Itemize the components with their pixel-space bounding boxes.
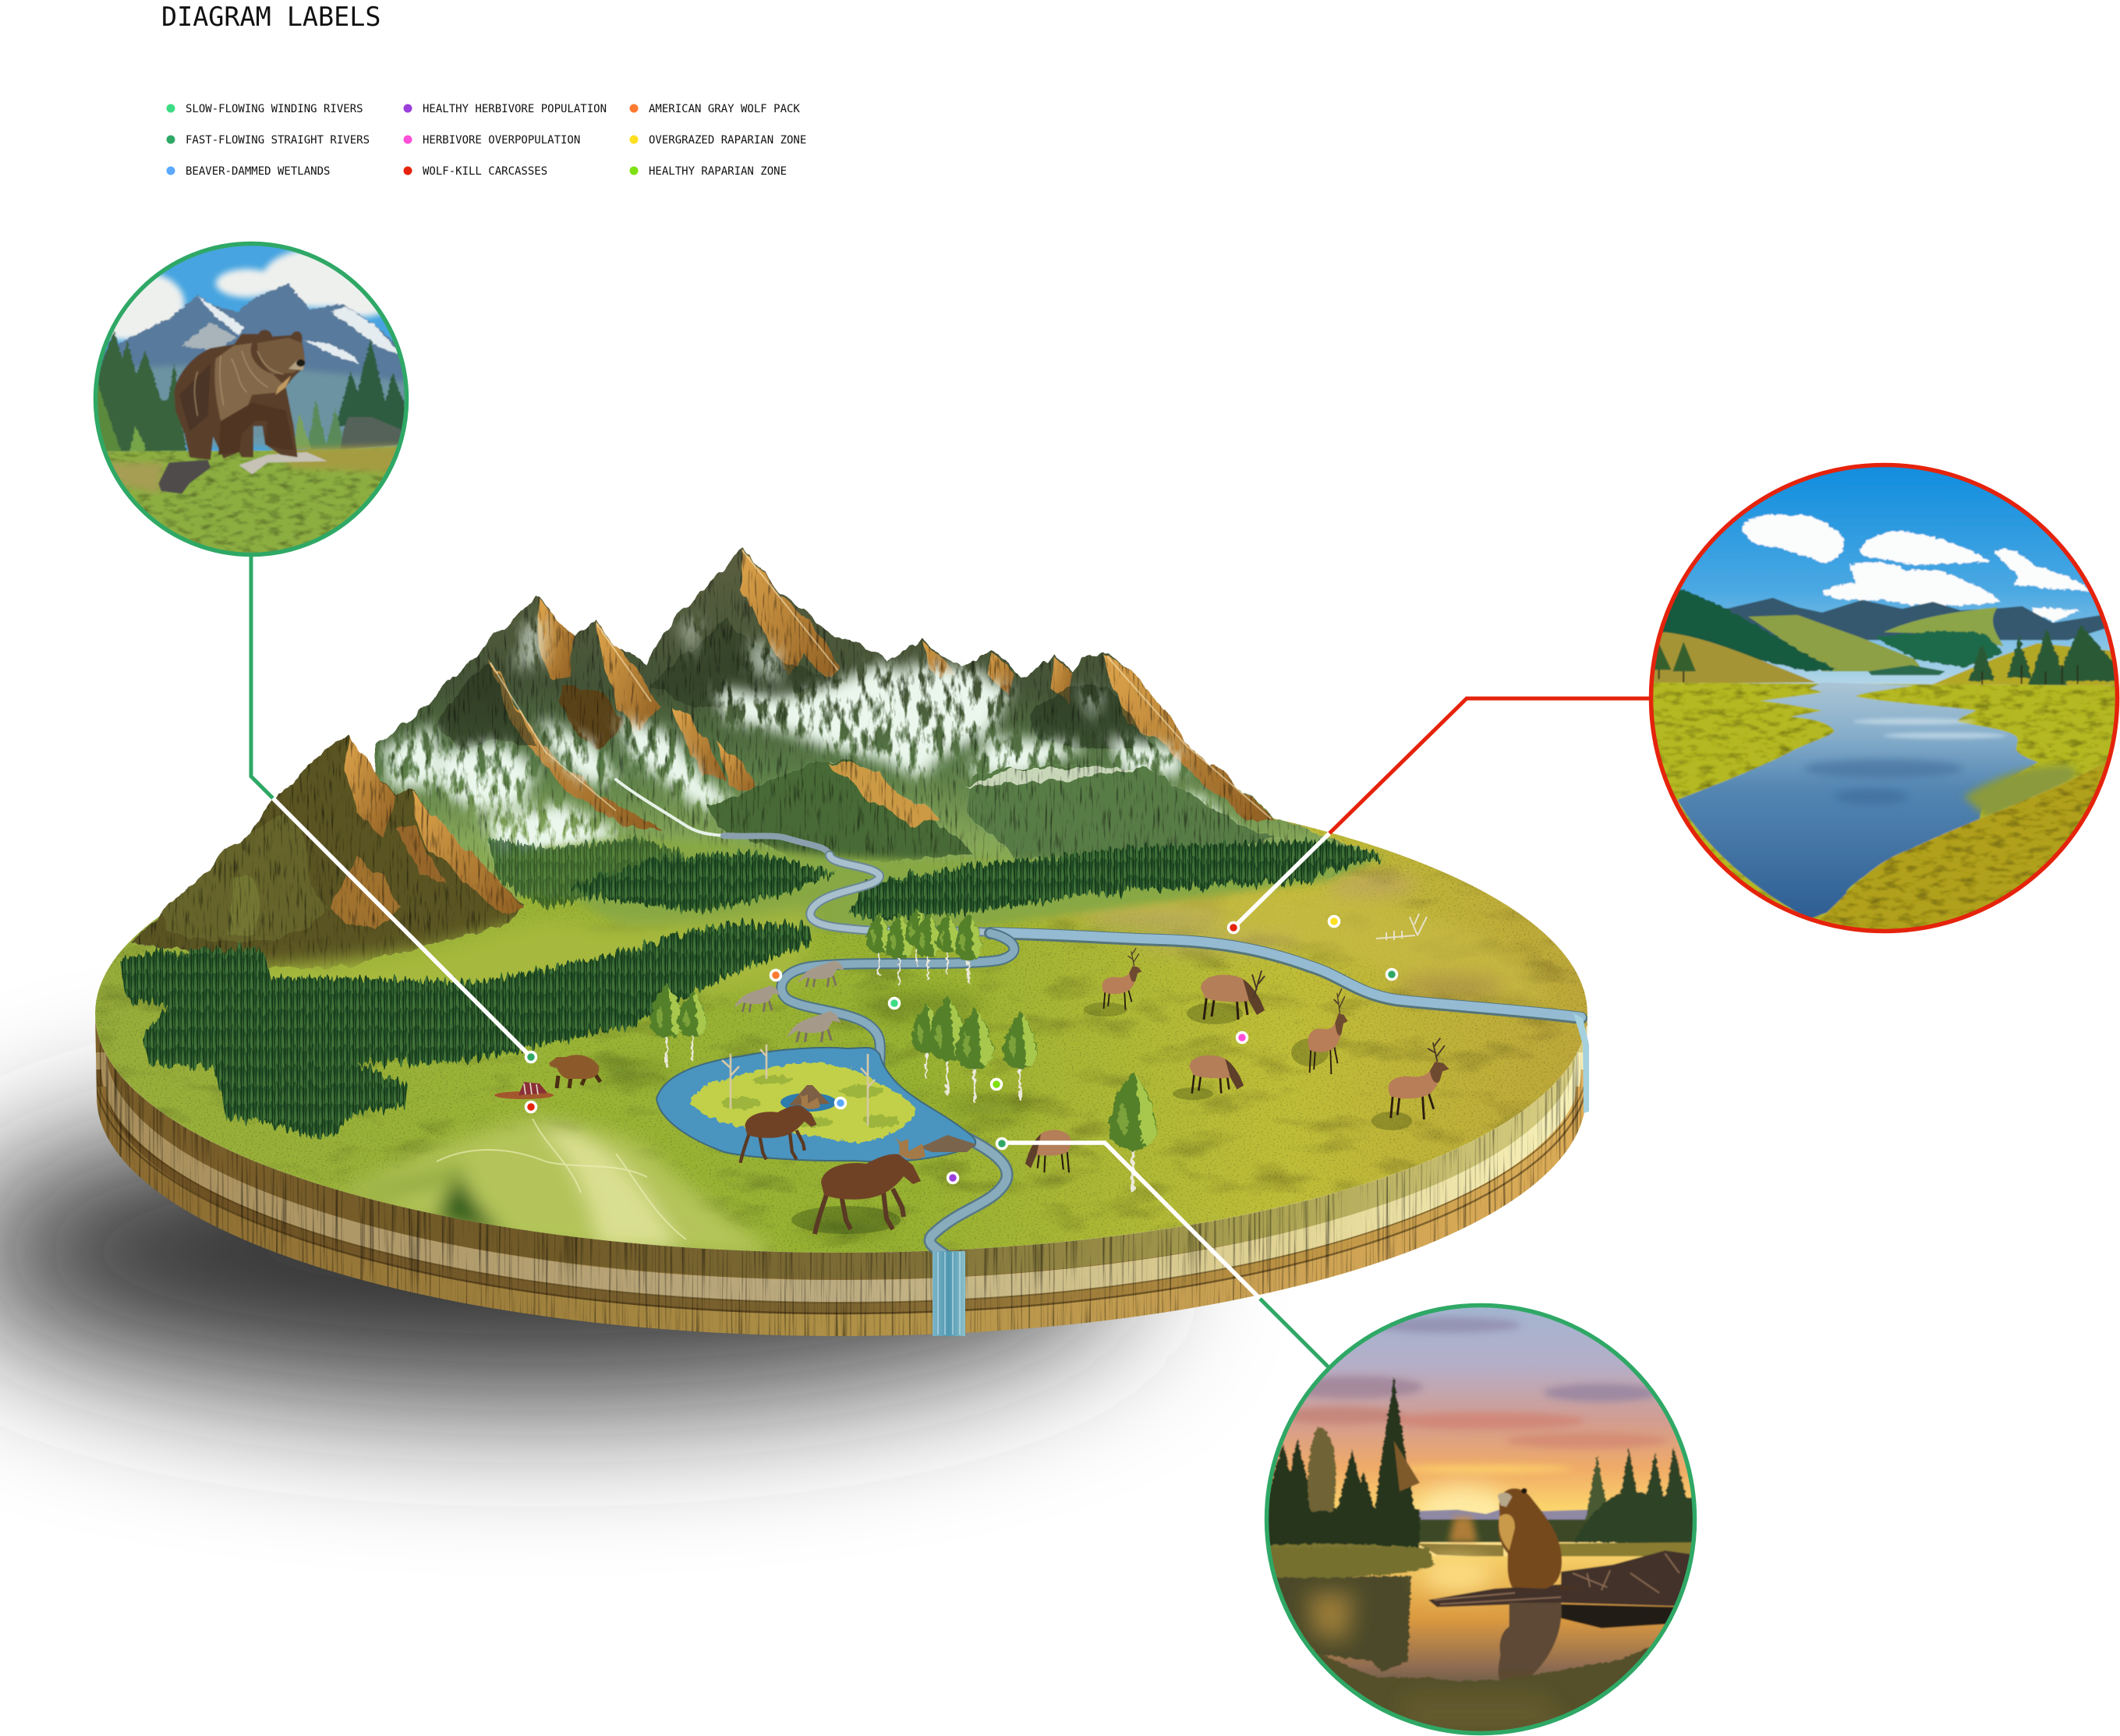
fast straight river [990,932,1581,1018]
forest: large left [120,924,812,1139]
marker: healthy zone [992,1079,1001,1090]
photo circle: meandering river valley [1637,452,2120,953]
sky [1255,1294,1717,1576]
ridge highlights [490,550,1271,819]
legend item: overgrazed zone: OVERGRAZED RAPARIAN ZONE [649,134,806,147]
photo circle: grizzly bear [94,242,409,557]
connector: bear circle [251,552,531,1057]
ground shadow [0,1103,1131,1399]
pond water [657,1048,975,1161]
meadow [86,446,423,571]
beaver dam [920,1135,976,1152]
beaver reflection [1499,1603,1562,1688]
legend item: overpopulation: HERBIVORE OVERPOPULATION [423,134,580,147]
photo circle: beaver at sunset [1255,1294,1717,1736]
forest: upper left hazy [487,838,686,908]
olive slopes [1748,615,1924,671]
island mottling [720,1075,900,1127]
marker: wolves [770,970,781,981]
animals [494,914,1449,1234]
right pines [294,338,419,450]
birch cluster lower [911,996,1037,1103]
river [1677,682,2037,919]
marker: carcass east [1229,923,1238,932]
bear [549,1055,600,1088]
dead trees [722,1045,875,1126]
disk: earth strata side [95,1016,1587,1336]
front-left ridge hill [338,1117,780,1255]
bear body [174,330,306,460]
boulder right [341,417,405,450]
green lower slopes [499,840,1388,932]
marker: overgrazed [1329,917,1340,926]
foreground reeds [1272,1629,1688,1736]
far treeline [1868,665,1945,675]
marker: wetland [836,1098,845,1108]
rivers [616,780,1581,1255]
wolves [734,960,844,1042]
carcass [494,1082,554,1099]
front foothill [706,760,1279,869]
lodge reflection [1561,1604,1676,1628]
ring [95,243,407,555]
forest: mid [568,852,836,912]
legend item: slow rivers: SLOW-FLOWING WINDING RIVERS [186,103,363,115]
legend item: healthy herbivores: HEALTHY HERBIVORE POPULATION [423,103,607,115]
sky [104,246,398,452]
lone birch [1109,1071,1157,1193]
pond [1255,1556,1717,1695]
distant mountains [1726,598,2108,640]
marker: overpopulation [1237,1032,1248,1043]
legend item: fast rivers: FAST-FLOWING STRAIGHT RIVERS [186,134,370,147]
legend item: wetlands: BEAVER-DAMMED WETLANDS [186,165,330,178]
elk group [1025,948,1449,1172]
right trees [1573,1446,1705,1545]
mountain range [374,547,1388,932]
lower river [930,1132,1007,1255]
beaver wetland [657,1045,976,1161]
left orange mountains [129,735,524,967]
near bank [1816,750,2120,953]
forest: right band [848,840,1382,920]
beaver [1498,1488,1584,1590]
connector: river circle [1233,698,1653,928]
reeds [1963,765,2076,819]
marker: carcass [526,1102,536,1112]
waterfall: front [933,1251,965,1336]
upper river [724,836,1009,933]
stick lodge [1428,1550,1705,1607]
ridge lines [437,1119,686,1239]
trees [650,908,1157,1193]
far treeline [1411,1519,1593,1542]
legend item: wolf pack: AMERICAN GRAY WOLF PACK [649,103,800,115]
range silhouette [374,547,1380,912]
glacial stream [616,780,724,836]
marker: bear [526,1052,536,1062]
beaver lodge [789,1085,830,1105]
lodge pool [780,1093,837,1112]
marker: slow river [889,998,900,1009]
grass shadows [593,995,1037,1236]
left pines [97,330,187,453]
title: DIAGRAM LABELS [161,2,380,32]
banks [1255,1543,1434,1578]
marker: fast river [1386,970,1397,979]
ring [1266,1305,1695,1734]
right rising meadow [1930,643,2120,690]
marker: beaver stream [996,1138,1007,1149]
map markers [526,917,1397,1183]
disk: grass top surface [95,774,1587,1253]
cloud bands [1279,1317,1668,1473]
golden rock faces [490,549,1277,830]
sun glow [1414,1486,1512,1542]
meadow [1637,682,2120,953]
peaks [86,283,423,437]
wetland island [689,1062,915,1143]
waterfall: right edge [1573,1013,1589,1113]
clouds [99,248,390,341]
winding river [781,933,1014,1087]
far hills [1414,1508,1590,1528]
dark forest hill left [1650,589,1838,671]
valley haze [134,364,405,451]
pines left [1653,642,1696,671]
big moose [791,1133,926,1234]
left foothill grass [133,908,811,1013]
dark rock shadow [557,686,624,752]
snow fields [382,616,1248,854]
clouds [1742,514,2090,621]
legend item: carcasses: WOLF-KILL CARCASSES [423,165,547,178]
overgrazed meadow tint [1014,875,1547,1002]
pond moose [741,1090,820,1163]
pines right [1968,624,2120,687]
skeleton [1376,914,1427,940]
left pines [1255,1377,1420,1550]
rock [158,460,211,493]
marker: healthy herbivore [948,1172,957,1183]
green forest mid [1874,631,2004,668]
near ochre hill [1637,632,1816,684]
ring [1651,465,2118,931]
birch pair left [650,983,706,1067]
legend item: healthy zone: HEALTHY RAPARIAN ZONE [649,165,787,178]
legend [167,103,806,178]
sky [1637,452,2120,702]
birch cluster upper [866,908,982,984]
connector: beaver circle [1002,1143,1330,1369]
